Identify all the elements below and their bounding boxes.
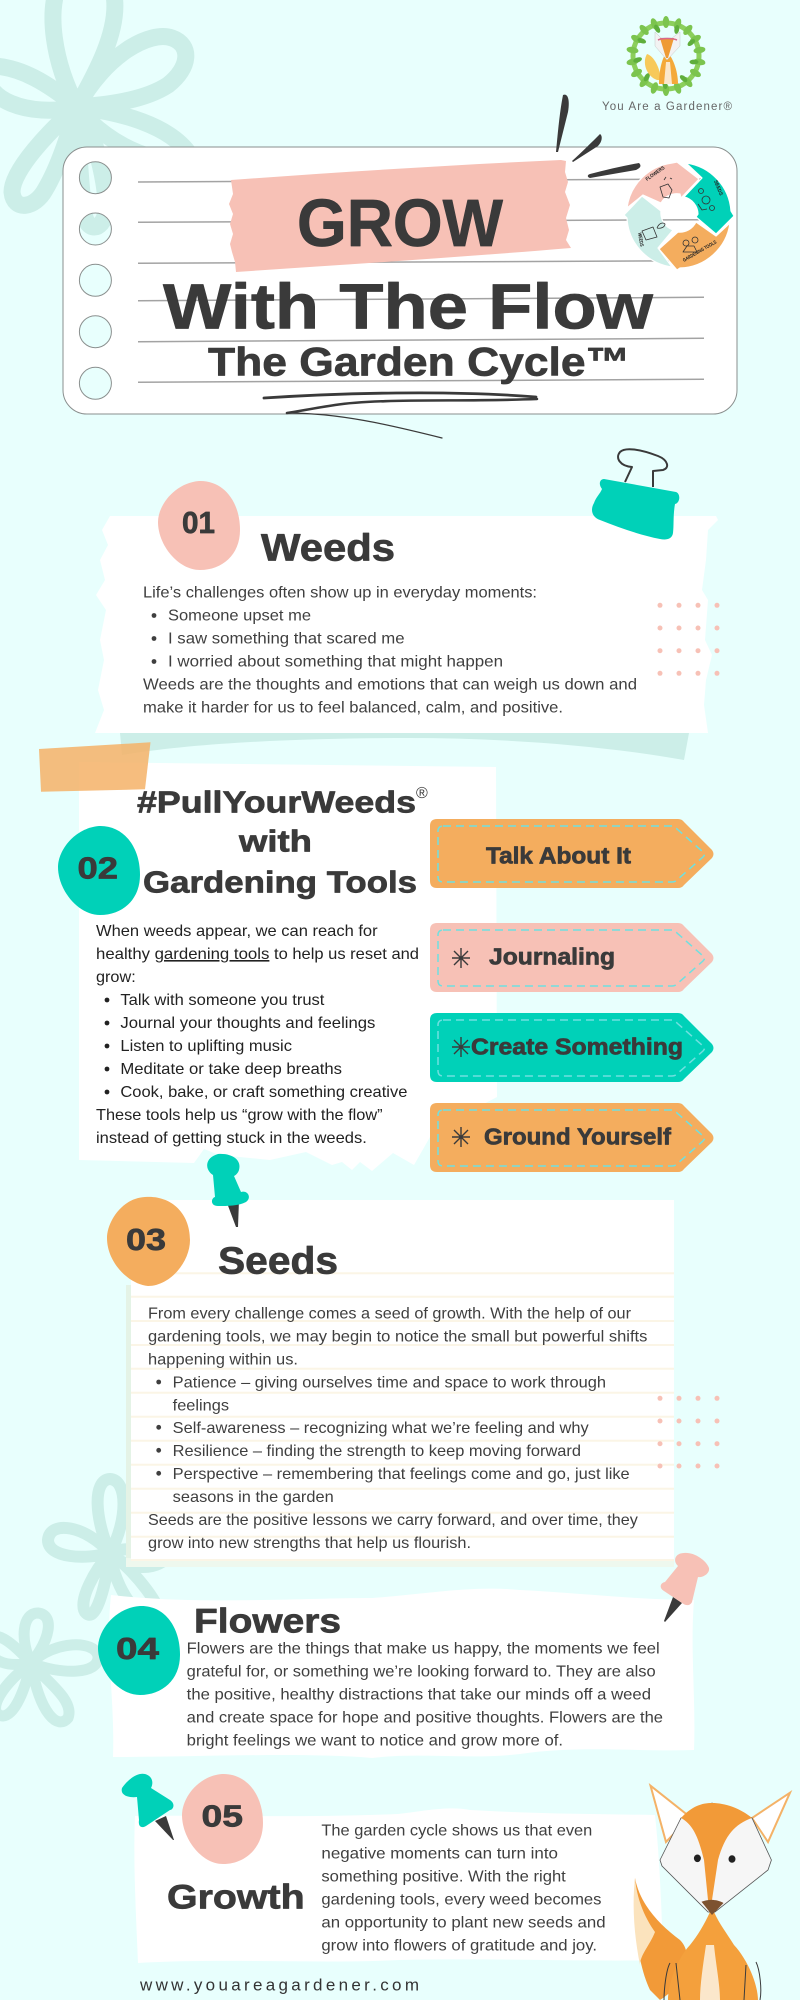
dot grid 1 xyxy=(658,603,720,676)
body text: gardening tools: Listen to uplifting music xyxy=(120,1038,292,1055)
heading: Weeds: Weeds xyxy=(261,528,395,570)
body text: growth: The garden cycle shows us that even xyxy=(321,1823,592,1840)
icon: teal push pin xyxy=(207,1154,249,1227)
body text: growth: negative moments can turn into xyxy=(321,1846,558,1863)
fox ears xyxy=(650,1786,690,1842)
tape behind title word xyxy=(229,160,571,272)
body text: flowers xyxy=(187,1640,663,1749)
body text: seeds: Self-awareness – recognizing what we’re feeling and why xyxy=(173,1420,589,1437)
body text: flowers: Flowers are the things that make us happy, the moments we feel xyxy=(187,1640,660,1657)
icon: star xyxy=(452,1037,470,1057)
body text: seeds: grow into new strengths that help us flourish. xyxy=(148,1535,471,1552)
body text: seeds: happening within us. xyxy=(148,1351,298,1368)
body text: seeds: feelings xyxy=(173,1397,229,1414)
body text: gardening tools: to help us reset and xyxy=(274,946,419,963)
number blob 03 xyxy=(107,1197,190,1286)
title card: notebook page xyxy=(63,147,737,414)
body text: weeds: I worried about something that might happen xyxy=(168,653,503,670)
body text: gardening tools: instead of getting stuck in the weeds. xyxy=(96,1130,367,1147)
body text: weeds: I saw something that scared me xyxy=(168,630,405,647)
arrow tag: Talk About It: Talk About It xyxy=(486,842,631,868)
number blob 02: 02 xyxy=(78,850,118,885)
title: GROW: GROW xyxy=(297,186,504,261)
body text: growth: something positive. With the right xyxy=(321,1869,566,1886)
wheel label: gardening tools: GARDENING TOOLS xyxy=(682,239,718,264)
decorative flower: top left xyxy=(0,0,190,227)
scribble underline xyxy=(264,393,537,438)
icon: teal push pin lower xyxy=(122,1774,174,1840)
decorative flower: lower left xyxy=(0,1613,98,1722)
body text: gardening tools: These tools help us “grow with the flow” xyxy=(96,1107,383,1124)
subtitle: The Garden Cycle: The Garden Cycle™ xyxy=(208,341,630,385)
body text: seeds: seasons in the garden xyxy=(173,1489,334,1506)
website url: www.youareagardener.com xyxy=(139,1976,419,1995)
icon: binder clip xyxy=(592,449,679,539)
fox eyes xyxy=(694,1854,736,1863)
body text: gardening tools: Meditate or take deep breaths xyxy=(120,1061,342,1078)
heading: Flowers: Flowers xyxy=(194,1602,341,1640)
number blob 05 xyxy=(182,1774,263,1864)
heading: PullYourWeeds with Gardening Tools: with xyxy=(238,824,312,859)
body text: gardening tools: healthy xyxy=(96,946,150,963)
wheel icons xyxy=(642,177,714,252)
heading: PullYourWeeds with Gardening Tools: ® xyxy=(416,785,428,802)
panel 04: Flowers xyxy=(98,1589,694,1758)
body text: gardening tools xyxy=(96,923,419,1147)
body text: growth xyxy=(321,1823,606,1955)
heading: Growth: Growth xyxy=(167,1878,305,1916)
arrow tag: Journaling: Journaling xyxy=(489,943,615,969)
body text: weeds: Weeds are the thoughts and emotions that can weigh us down and xyxy=(143,676,637,693)
garden cycle wheel xyxy=(624,162,734,270)
body text: seeds xyxy=(148,1305,647,1552)
logo name: You Are a Gardener® xyxy=(602,101,733,113)
body text: growth: an opportunity to plant new seeds and xyxy=(321,1915,606,1932)
body text: seeds: Perspective – remembering that feelings come and go, just like xyxy=(173,1466,630,1483)
wheel label: weeds: WEEDS xyxy=(636,232,644,248)
fox tail xyxy=(634,1878,687,2000)
body text: flowers: and create space for hope and positive thoughts. Flowers are the xyxy=(187,1709,663,1726)
decorative flower: lower middle xyxy=(48,1479,165,1620)
body text: weeds: Life’s challenges often show up in everyday moments: xyxy=(143,584,537,601)
body text: gardening tools: Talk with someone you trust xyxy=(120,992,325,1009)
body text: flowers: grateful for, or something we’re looking forward to. They are also xyxy=(187,1663,656,1680)
dot grid 2 xyxy=(658,1396,720,1468)
number blob 03: 03 xyxy=(126,1222,166,1257)
sticky note xyxy=(39,742,150,792)
icon: star xyxy=(452,948,470,968)
heading: PullYourWeeds with Gardening Tools: Gardening Tools xyxy=(143,865,417,900)
heading: Seeds: Seeds xyxy=(218,1240,338,1282)
body text: weeds: make it harder for us to feel balanced, calm, and positive. xyxy=(143,699,563,716)
logo: You Are a Gardener xyxy=(602,16,733,113)
body text: seeds: Seeds are the positive lessons we carry forward, and over time, they xyxy=(148,1512,638,1529)
number blob 04: 04 xyxy=(116,1631,160,1666)
body text: flowers: the positive, healthy distractions that take our minds off a weed xyxy=(187,1686,651,1703)
heading: PullYourWeeds with Gardening Tools xyxy=(137,785,428,900)
panel 05: Growth xyxy=(134,1774,663,1963)
illustration: fox xyxy=(634,1786,790,2000)
fox nose xyxy=(702,1900,724,1915)
arrow tag: Ground Yourself: Ground Yourself xyxy=(484,1124,671,1150)
body text: gardening tools: grow: xyxy=(96,969,136,986)
body text: seeds: Resilience – finding the strength to keep moving forward xyxy=(173,1443,581,1460)
number blob 01: 01 xyxy=(182,505,215,540)
icon: star xyxy=(452,1127,470,1147)
arrow tag: Create Something xyxy=(430,1013,714,1082)
body text: gardening tools: Cook, bake, or craft something creative xyxy=(120,1084,407,1101)
body text: gardening tools: When weeds appear, we can reach for xyxy=(96,923,378,940)
body text: seeds: gardening tools, we may begin to notice the small but powerful shifts xyxy=(148,1328,647,1345)
body text: gardening tools: gardening tools xyxy=(155,946,269,963)
wheel label: seeds: SEEDS xyxy=(712,180,724,197)
panel 01: Weeds xyxy=(95,481,718,733)
body text: weeds: Someone upset me xyxy=(168,607,311,624)
panel 02: Gardening Tools xyxy=(79,762,497,1171)
heading: PullYourWeeds with Gardening Tools: #PullYourWeeds xyxy=(137,785,416,820)
body text: growth: gardening tools, every weed becomes xyxy=(321,1892,602,1909)
panel 03: Seeds xyxy=(107,1197,674,1567)
body text: seeds: Patience – giving ourselves time and space to work through xyxy=(173,1374,606,1391)
accent strokes xyxy=(556,95,640,178)
number blob 05: 05 xyxy=(202,1799,243,1834)
fox body xyxy=(668,1912,758,2000)
under-panel swoosh xyxy=(120,733,689,760)
body text: weeds xyxy=(143,584,637,716)
number blob 04 xyxy=(98,1606,180,1695)
wheel label: flowers: FLOWERS xyxy=(645,165,667,183)
arrow tag: Create Something: Create Something xyxy=(471,1034,683,1060)
title: With The Flow: With The Flow xyxy=(163,270,653,342)
arrow tag: Journaling xyxy=(430,923,714,992)
number blob 01 xyxy=(158,481,240,570)
body text: growth: grow into flowers of gratitude and joy. xyxy=(321,1938,597,1955)
arrow tag: Ground Yourself xyxy=(430,1103,714,1172)
fox face xyxy=(660,1803,771,1912)
number blob 02 xyxy=(58,826,140,915)
body text: gardening tools: Journal your thoughts and feelings xyxy=(120,1015,375,1032)
arrow tag: Talk About It xyxy=(430,819,714,888)
icon: pink push pin xyxy=(661,1553,709,1622)
body text: flowers: bright feelings we want to notice and grow more of. xyxy=(187,1732,563,1749)
body text: seeds: From every challenge comes a seed of growth. With the help of our xyxy=(148,1305,632,1322)
